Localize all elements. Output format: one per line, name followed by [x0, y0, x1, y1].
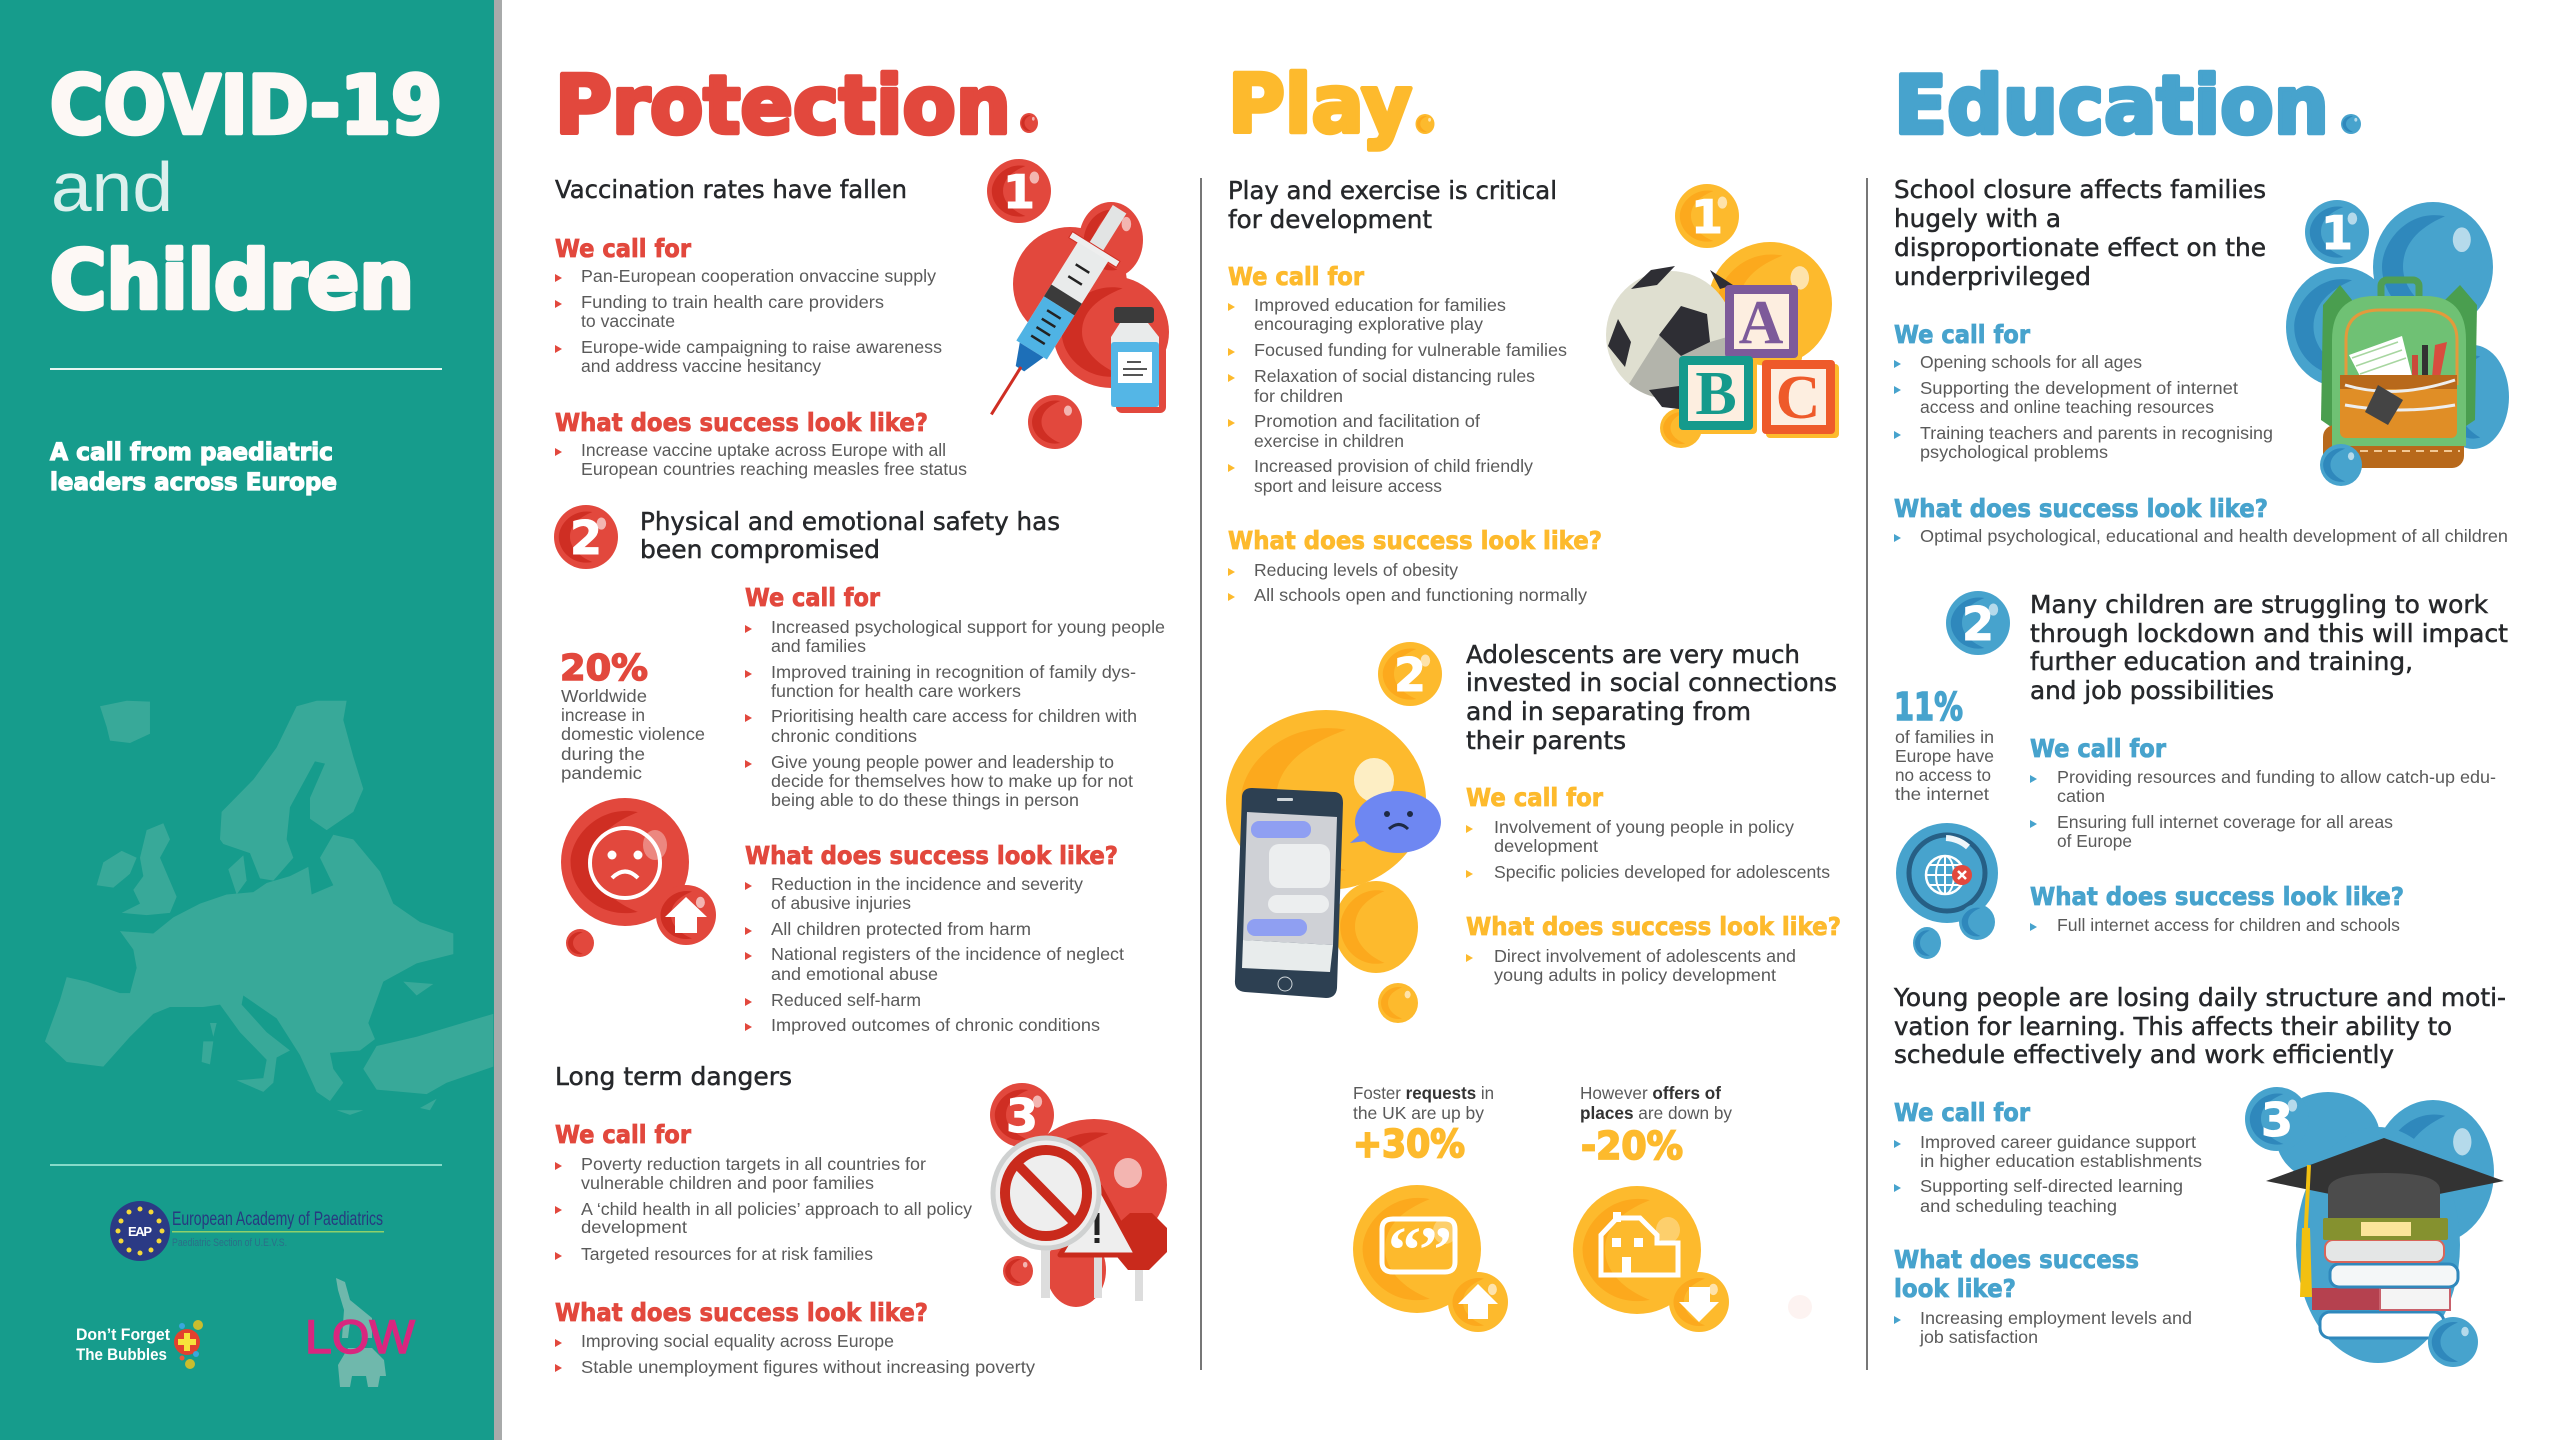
stat: 20%: during the [561, 744, 645, 764]
section: safety lists: decide for themselves how to make up for not [771, 771, 1133, 791]
logo: LOW: LOW [305, 1310, 416, 1363]
section: adolescents: What does success look like? [1466, 912, 1841, 941]
stat: 20%: domestic violence [561, 724, 705, 744]
heading: Play: Play [1228, 58, 1412, 151]
section: play and exercise: Promotion and facilitation of [1254, 411, 1480, 431]
section: long term dangers: What does success look like? [555, 1298, 928, 1327]
section: struggling: We call for [2030, 734, 2167, 763]
section: safety heading: 2 [570, 511, 602, 565]
section: play and exercise: Play and exercise is critical [1228, 176, 1557, 205]
section: safety lists: What does success look like? [745, 841, 1118, 870]
section: adolescents: Adolescents are very much [1466, 640, 1800, 669]
section: safety lists [745, 583, 1165, 1035]
section: long term dangers: development [581, 1217, 687, 1237]
section: young people: job satisfaction [1919, 1327, 2038, 1347]
section: long term dangers: We call for [555, 1120, 692, 1149]
section: young people [1893, 983, 2506, 1347]
icon: backpack [2286, 200, 2509, 486]
section: safety heading: Physical and emotional safety has [640, 507, 1060, 536]
section: young people: schedule effectively and work efficiently [1894, 1040, 2394, 1069]
section: struggling: and job possibilities [2030, 676, 2274, 705]
section: safety lists: We call for [745, 583, 881, 612]
section: long term dangers: Stable unemployment figures without increasing poverty [581, 1357, 1035, 1377]
section: safety lists: Give young people power and leadership to [771, 752, 1114, 772]
section: struggling: Full internet access for children and schools [2057, 915, 2400, 935]
section: young people: We call for [1894, 1098, 2031, 1127]
stat: foster offers: -20% [1581, 1124, 1683, 1168]
section: safety lists: and emotional abuse [771, 964, 938, 984]
section: play and exercise: exercise in children [1254, 431, 1404, 451]
heading: Protection: Protection [555, 59, 1011, 152]
section: adolescents [1378, 640, 1841, 985]
section: struggling: further education and training, [2030, 647, 2413, 676]
section: adolescents: We call for [1466, 783, 1604, 812]
stat: foster offers: However offers of [1580, 1083, 1721, 1103]
section: long term dangers: A ‘child health in all policies’ approach to all policy [581, 1199, 972, 1219]
heading: Education: Education [1894, 59, 2329, 152]
section: struggling: What does success look like? [2030, 882, 2404, 911]
section: school closure: Optimal psychological, educational and health development of all children [1920, 526, 2508, 546]
section: safety heading: been compromised [640, 535, 880, 564]
section: play and exercise: What does success look like? [1228, 526, 1602, 555]
stat: foster requests: Foster requests in [1353, 1083, 1494, 1103]
section: school closure: disproportionate effect on the [1894, 233, 2266, 262]
icon: ball and blocks [1606, 184, 1839, 448]
section: safety lists: chronic conditions [771, 726, 917, 746]
section: vaccination: Increase vaccine uptake across Europe with all [581, 440, 946, 460]
section: long term dangers: vulnerable children and poor families [581, 1173, 874, 1193]
section: struggling [1946, 590, 2508, 935]
panel: education [1893, 59, 2509, 1367]
section: struggling: through lockdown and this will impact [2030, 619, 2508, 648]
section: young people: vation for learning. This affects their ability to [1894, 1012, 2452, 1041]
section: safety lists: Improved training in recognition of family dys- [771, 662, 1136, 682]
section: struggling: of Europe [2057, 831, 2132, 851]
section: long term dangers: Long term dangers [555, 1062, 792, 1091]
section: adolescents: Direct involvement of adolescents and [1494, 946, 1796, 966]
section: vaccination: We call for [555, 234, 692, 263]
stat: 11%: Europe have [1895, 746, 1994, 766]
section: play and exercise: Increased provision of child friendly [1254, 456, 1533, 476]
section: vaccination: Funding to train health care providers [581, 292, 884, 312]
section: long term dangers: Improving social equality across Europe [581, 1331, 894, 1351]
stat: 11%: of families in [1895, 727, 1994, 747]
section: adolescents: invested in social connections [1466, 668, 1837, 697]
stat: 11% [1894, 685, 1994, 804]
section: struggling: 2 [1962, 597, 1994, 651]
section: adolescents: 2 [1394, 648, 1426, 702]
section: safety lists: function for health care workers [771, 681, 1021, 701]
section: adolescents: their parents [1466, 726, 1626, 755]
section: school closure: access and online teaching resources [1920, 397, 2214, 417]
section: play and exercise: for children [1254, 386, 1343, 406]
section: young people: look like? [1894, 1274, 2016, 1303]
section: young people: What does success [1894, 1245, 2139, 1274]
logo: European Academy of Paediatrics: EAP [128, 1224, 152, 1239]
icon: backpack: 1 [2321, 206, 2353, 260]
section: adolescents: Specific policies developed for adolescents [1494, 862, 1830, 882]
section: vaccination: to vaccinate [581, 311, 675, 331]
section: safety lists: Reduced self-harm [771, 990, 921, 1010]
icon: warning signs [990, 1083, 1167, 1307]
section: play and exercise: All schools open and functioning normally [1254, 585, 1587, 605]
section: safety lists: and families [771, 636, 866, 656]
logo: Don't Forget The Bubbles: Don’t Forget [76, 1325, 170, 1344]
section: long term dangers [555, 1062, 1035, 1377]
section: young people: Supporting self-directed learning [1920, 1176, 2183, 1196]
title: COVID-19 [50, 59, 442, 152]
section: play and exercise: Reducing levels of obesity [1254, 560, 1458, 580]
icon: ball and blocks: 1 [1691, 190, 1723, 244]
stat: foster requests: the UK are up by [1353, 1103, 1484, 1123]
section: struggling: Many children are struggling to work [2030, 590, 2489, 619]
section: safety lists: Reduction in the incidence and severity [771, 874, 1083, 894]
icon: ball and blocks: B [1695, 360, 1737, 428]
subtitle: A call from paediatric [50, 438, 333, 466]
section: safety lists: Increased psychological support for young people [771, 617, 1165, 637]
section: safety lists: Improved outcomes of chronic conditions [771, 1015, 1100, 1035]
section: safety lists: of abusive injuries [771, 893, 911, 913]
divider [1200, 178, 1202, 1370]
logo: Don't Forget The Bubbles: The Bubbles [76, 1345, 167, 1364]
title [50, 59, 442, 327]
divider [1866, 178, 1868, 1370]
stat: 20%: pandemic [561, 763, 642, 783]
stat: foster offers: places are down by [1580, 1103, 1732, 1123]
stat: 20%: increase in [561, 705, 645, 725]
stat: 11%: 11% [1894, 685, 1963, 729]
section: adolescents: young adults in policy development [1494, 965, 1776, 985]
section: play and exercise: Improved education for families [1254, 295, 1506, 315]
icon: warning signs: 3 [1006, 1089, 1038, 1143]
stat: foster requests: “” [1388, 1214, 1450, 1287]
logo: European Academy of Paediatrics [110, 1201, 384, 1261]
icon: sad face [561, 798, 716, 957]
europe map [45, 701, 493, 1115]
title: Children [50, 234, 414, 327]
subtitle: leaders across Europe [50, 468, 337, 496]
section: safety lists: being able to do these things in person [771, 790, 1079, 810]
panel: protection [554, 59, 1169, 1377]
title: and [51, 148, 173, 226]
section: struggling: cation [2057, 786, 2105, 806]
section: school closure: Training teachers and parents in recognising [1920, 423, 2273, 443]
section: play and exercise: Focused funding for vulnerable families [1254, 340, 1567, 360]
section: safety lists: All children protected from harm [771, 919, 1031, 939]
section: play and exercise: We call for [1228, 262, 1365, 291]
icon: graduation cap and books [2245, 1087, 2504, 1367]
section: vaccination: and address vaccine hesitancy [581, 356, 821, 376]
section: young people: Increasing employment levels and [1920, 1308, 2192, 1328]
section: young people: and scheduling teaching [1920, 1196, 2117, 1216]
stat: 20% [560, 648, 705, 783]
stat: foster offers [1573, 1083, 1732, 1332]
section: vaccination: Europe-wide campaigning to raise awareness [581, 337, 942, 357]
icon: graduation cap and books: 3 [2261, 1093, 2293, 1147]
section: play and exercise: encouraging explorative play [1254, 314, 1483, 334]
section: school closure: psychological problems [1920, 442, 2108, 462]
section: school closure [1894, 175, 2508, 546]
section: school closure: Supporting the development of internet [1920, 378, 2238, 398]
stat: foster requests: +30% [1353, 1122, 1465, 1166]
section: adolescents: and in separating from [1466, 697, 1751, 726]
section: vaccination: Vaccination rates have fallen [555, 175, 907, 204]
section: vaccination: Pan-European cooperation onvaccine supply [581, 266, 936, 286]
icon: no internet [1896, 823, 1998, 959]
section: school closure: Opening schools for all ages [1920, 352, 2142, 372]
section: long term dangers: Targeted resources for at risk families [581, 1244, 873, 1264]
section: play and exercise: sport and leisure access [1254, 476, 1442, 496]
section: struggling: Ensuring full internet coverage for all areas [2057, 812, 2393, 832]
stat: 11%: no access to [1895, 765, 1991, 785]
icon: syringe and vaccine [968, 159, 1169, 449]
section: safety lists: National registers of the incidence of neglect [771, 944, 1124, 964]
section: struggling: Providing resources and funding to allow catch-up edu- [2057, 767, 2496, 787]
icon: ball and blocks: C [1776, 364, 1820, 432]
section: young people: Improved career guidance support [1920, 1132, 2196, 1152]
section: school closure: What does success look like? [1894, 494, 2268, 523]
section: young people: Young people are losing daily structure and moti- [1893, 983, 2506, 1012]
stat: foster requests [1353, 1083, 1508, 1332]
section: vaccination [555, 175, 967, 479]
section: play and exercise: Relaxation of social distancing rules [1254, 366, 1535, 386]
panel: sidebar [0, 0, 502, 1440]
section: play and exercise [1228, 176, 1602, 605]
panel: play [1226, 58, 1841, 1332]
section: vaccination: What does success look like? [555, 408, 928, 437]
section: adolescents: Involvement of young people in policy [1494, 817, 1794, 837]
icon: syringe and vaccine: 1 [1003, 165, 1035, 219]
section: school closure: hugely with a [1894, 204, 2061, 233]
logo: European Academy of Paediatrics: Paediatric Section of U.E.V.S. [172, 1237, 287, 1249]
icon: phone [1226, 710, 1441, 1023]
icon: ball and blocks: A [1739, 289, 1784, 357]
section: play and exercise: for development [1228, 205, 1432, 234]
section: long term dangers: Poverty reduction targets in all countries for [581, 1154, 926, 1174]
section: school closure: We call for [1894, 320, 2031, 349]
section: school closure: School closure affects families [1894, 175, 2266, 204]
logo: Don't Forget The Bubbles [76, 1320, 203, 1369]
section: vaccination: European countries reaching measles free status [581, 459, 967, 479]
stat: 20%: Worldwide [561, 686, 647, 706]
section: adolescents: development [1494, 836, 1598, 856]
section: safety lists: Prioritising health care access for children with [771, 706, 1137, 726]
section: school closure: underprivileged [1894, 262, 2091, 291]
stat: 11%: the internet [1895, 784, 1989, 804]
stat: 20%: 20% [560, 648, 648, 689]
section: young people: in higher education establishments [1920, 1151, 2202, 1171]
logo: European Academy of Paediatrics: European Academy of Paediatrics [172, 1209, 383, 1230]
logo: LOW [305, 1278, 416, 1387]
subtitle [50, 438, 337, 496]
section: safety heading [554, 505, 1060, 569]
